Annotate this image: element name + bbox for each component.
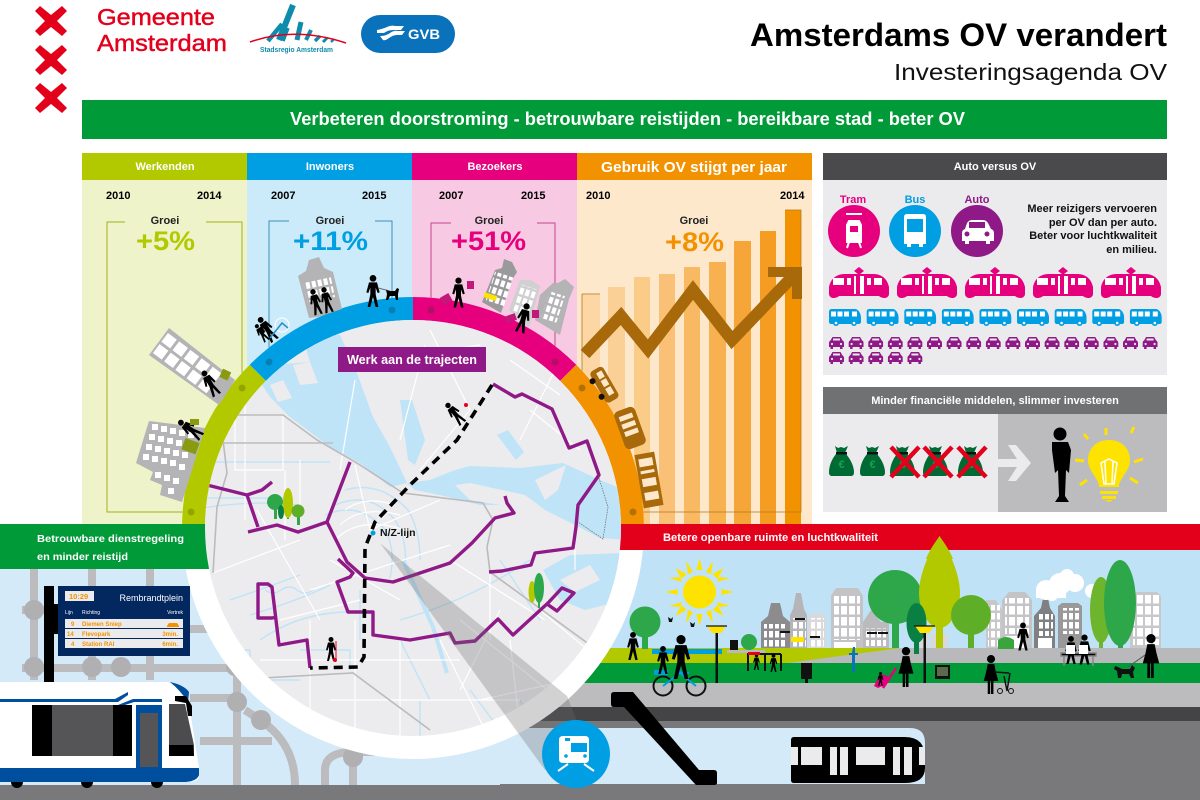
figure: worker south: [326, 637, 337, 662]
departure board: Diemen Sniep: [82, 622, 122, 628]
green headline banner: [82, 100, 1167, 139]
trees: [630, 536, 1136, 654]
building: stepped office: [136, 421, 205, 502]
lime tree top overlapping banner: [926, 536, 953, 559]
figure: parent with pram: [874, 647, 914, 688]
map of Amsterdam: [200, 315, 630, 745]
docks: [270, 345, 600, 592]
red banner: openbare ruimte: Betere openbare ruimte en luchtkwaliteit: [663, 532, 878, 544]
icon: person: [1052, 428, 1071, 502]
building: tourist houses: [482, 259, 574, 335]
panel: Auto versus OV: Auto versus OV: [954, 161, 1037, 173]
text block: reizigers: per OV dan per auto.: [1049, 217, 1157, 229]
label: N/Z-lijn: N/Z-lijn: [380, 527, 416, 539]
green banner: betrouwbare dienstregeling: [0, 524, 230, 569]
logo: GVB: [361, 15, 455, 53]
panel: Gebruik OV stijgt per jaar: 2010: [586, 190, 610, 202]
departure board: 6min.: [162, 642, 178, 648]
panel: Minder financiele middelen: [823, 387, 1167, 512]
panel: Werkenden: Werkenden: [135, 161, 195, 173]
label: N/Z-lijn: [370, 528, 415, 538]
icon: water fountain: [849, 647, 858, 672]
icons on the ring: workers and buildings: [136, 257, 664, 508]
icon: tram: [828, 194, 880, 257]
label: Werk aan de trajecten: Werk aan de trajecten: [347, 352, 477, 367]
figure: tourist walking: [504, 302, 539, 334]
departure board: Lijn: [65, 610, 73, 616]
panel: Inwoners: +11%: [293, 226, 368, 256]
panel: Bezoekers: Bezoekers: [467, 161, 523, 173]
white disc and coloured ring: [182, 297, 644, 759]
tunnel: [500, 728, 925, 784]
departure board: 14: [67, 632, 74, 638]
left scene: tube network background: [0, 569, 620, 785]
panel: Gebruik OV stijgt per jaar: 2014: [780, 190, 805, 202]
text block: reizigers: en milieu.: [1106, 244, 1157, 256]
figure: dog walker: [366, 275, 399, 307]
icon row: trams: [829, 267, 1161, 298]
icon: bus: Bus: [905, 194, 925, 206]
icon: car: Auto: [964, 194, 990, 206]
building: tilted office: [149, 328, 235, 405]
text block: reizigers: Beter voor luchtkwaliteit: [1029, 230, 1157, 242]
buildings row: [761, 588, 1161, 648]
departure board: 3min.: [162, 632, 178, 638]
departure board: Station RAI: [82, 642, 115, 648]
green headline banner: Verbeteren doorstroming - betrouwbare reistijden - bereikbare stad - beter OV: [290, 108, 966, 129]
panel: Bezoekers: 2015: [521, 190, 545, 202]
figure: cyclists: [654, 635, 706, 696]
red banner: openbare ruimte: [600, 524, 1200, 550]
arrow: to smarter investing: [998, 445, 1031, 481]
logo: Amsterdam three crosses: [35, 6, 67, 113]
purple routes: [207, 384, 599, 668]
right scene: street and sky: [500, 550, 1200, 800]
departure board: Richting: [82, 610, 100, 616]
wedge: station magnifier: [380, 543, 590, 770]
icon: metro station: [542, 720, 610, 788]
panel: Inwoners: Inwoners: [306, 161, 354, 173]
logo: Gemeente Amsterdam: [97, 4, 227, 56]
departure board: Rembrandtplein: [119, 593, 183, 603]
text block: reizigers: [1027, 203, 1157, 256]
dotted district outline: [578, 478, 608, 540]
panel: Inwoners: Groei: [316, 215, 344, 227]
figure: runner: [627, 632, 639, 660]
panel: Werkenden: Groei: [151, 215, 179, 227]
dashed N/Z-lijn: [310, 385, 492, 668]
logo: Gemeente Amsterdam: Gemeente: [97, 4, 215, 30]
panel: Werkenden: 2010: [106, 190, 130, 202]
icon: light bulb: [1075, 427, 1143, 502]
tram: [0, 682, 199, 788]
escalator: [611, 692, 717, 785]
figure: cyclists wheelchair: [252, 314, 289, 344]
panel: Bezoekers: [412, 153, 577, 525]
icon: waste container: [935, 665, 950, 679]
icon rows: cars: [829, 337, 1158, 364]
green banner: betrouwbare dienstregeling: en minder reistijd: [37, 551, 128, 563]
road strip: [0, 785, 1200, 800]
railway lines: [213, 415, 590, 730]
icon: money bags: [829, 446, 986, 477]
panel: Inwoners: [247, 153, 412, 525]
subtitle: Investeringsagenda OV: [894, 59, 1168, 85]
logo: Stadsregio Amsterdam: Stadsregio Amsterdam: [260, 47, 333, 54]
panel: Inwoners: 2015: [362, 190, 386, 202]
departure board: Vertrek: [167, 610, 183, 616]
street lamps: [706, 626, 935, 683]
growth percentage: +8%: [665, 227, 724, 257]
panel: Minder financiele middelen: Minder financiële middelen, slimmer investeren: [871, 395, 1119, 407]
departure board: 10:29: [69, 592, 88, 601]
canals: [200, 462, 540, 740]
figure: worker north: [445, 402, 468, 426]
figure: worker running: [198, 368, 231, 398]
icon: bus: [889, 194, 941, 257]
figures: two residents: [307, 286, 335, 316]
icon: car: [951, 194, 1003, 257]
figure: bench: [1061, 634, 1096, 666]
icon: trees west: [267, 488, 304, 525]
figure: tourist with suitcase: [440, 278, 474, 308]
green banner: betrouwbare dienstregeling: Betrouwbare dienstregeling: [37, 533, 184, 545]
figure: dog walker: [1114, 634, 1159, 678]
panel: Gebruik OV stijgt per jaar: Gebruik OV stijgt per jaar: [601, 159, 787, 176]
arrow: rising trend: [585, 272, 797, 354]
metro train: [791, 737, 925, 783]
panel: Werkenden: [82, 153, 247, 525]
icon: tram: Tram: [840, 194, 866, 206]
bar chart: OV use: [582, 210, 801, 525]
panel: Gebruik OV stijgt per jaar: [577, 153, 812, 525]
panel: Werkenden: +5%: [136, 226, 195, 256]
logo: GVB: GVB: [408, 26, 440, 42]
panel: Bezoekers: 2007: [439, 190, 463, 202]
title: Amsterdams OV verandert: [750, 17, 1167, 53]
building: canal house: [298, 257, 342, 318]
figure: elderly with walker: [984, 655, 1014, 694]
cloud: [1036, 569, 1099, 601]
panel: Gebruik OV stijgt per jaar: Groei: [680, 215, 708, 227]
panel: Bezoekers: Groei: [475, 215, 503, 227]
departure board: 4: [71, 642, 75, 648]
icon: trees east: [528, 573, 544, 608]
streets: [213, 330, 600, 740]
figure: worker climbing: [175, 416, 205, 454]
sun: [666, 558, 734, 626]
departure board: [44, 586, 190, 682]
panel: Bezoekers: +51%: [451, 226, 526, 256]
logo: Stadsregio Amsterdam: [250, 5, 346, 54]
icon: litter bin: [801, 663, 812, 683]
icons: tilted vehicles: [585, 365, 664, 508]
small birds: [668, 617, 695, 627]
logo: Gemeente Amsterdam: Amsterdam: [97, 30, 227, 56]
water: [250, 335, 625, 610]
icon: playground: [730, 634, 781, 672]
panel: Auto versus OV: [823, 153, 1167, 375]
figure: gardener: [998, 622, 1029, 650]
figures on the street: [627, 622, 1159, 696]
text block: reizigers: Meer reizigers vervoeren: [1027, 203, 1157, 215]
departure board: Flevopark: [82, 632, 111, 638]
departure board: 9: [71, 622, 75, 628]
panel: Werkenden: 2014: [197, 190, 222, 202]
label: Werk aan de trajecten: [338, 347, 486, 372]
icon row: buses: [829, 309, 1162, 326]
panel: Inwoners: 2007: [271, 190, 295, 202]
